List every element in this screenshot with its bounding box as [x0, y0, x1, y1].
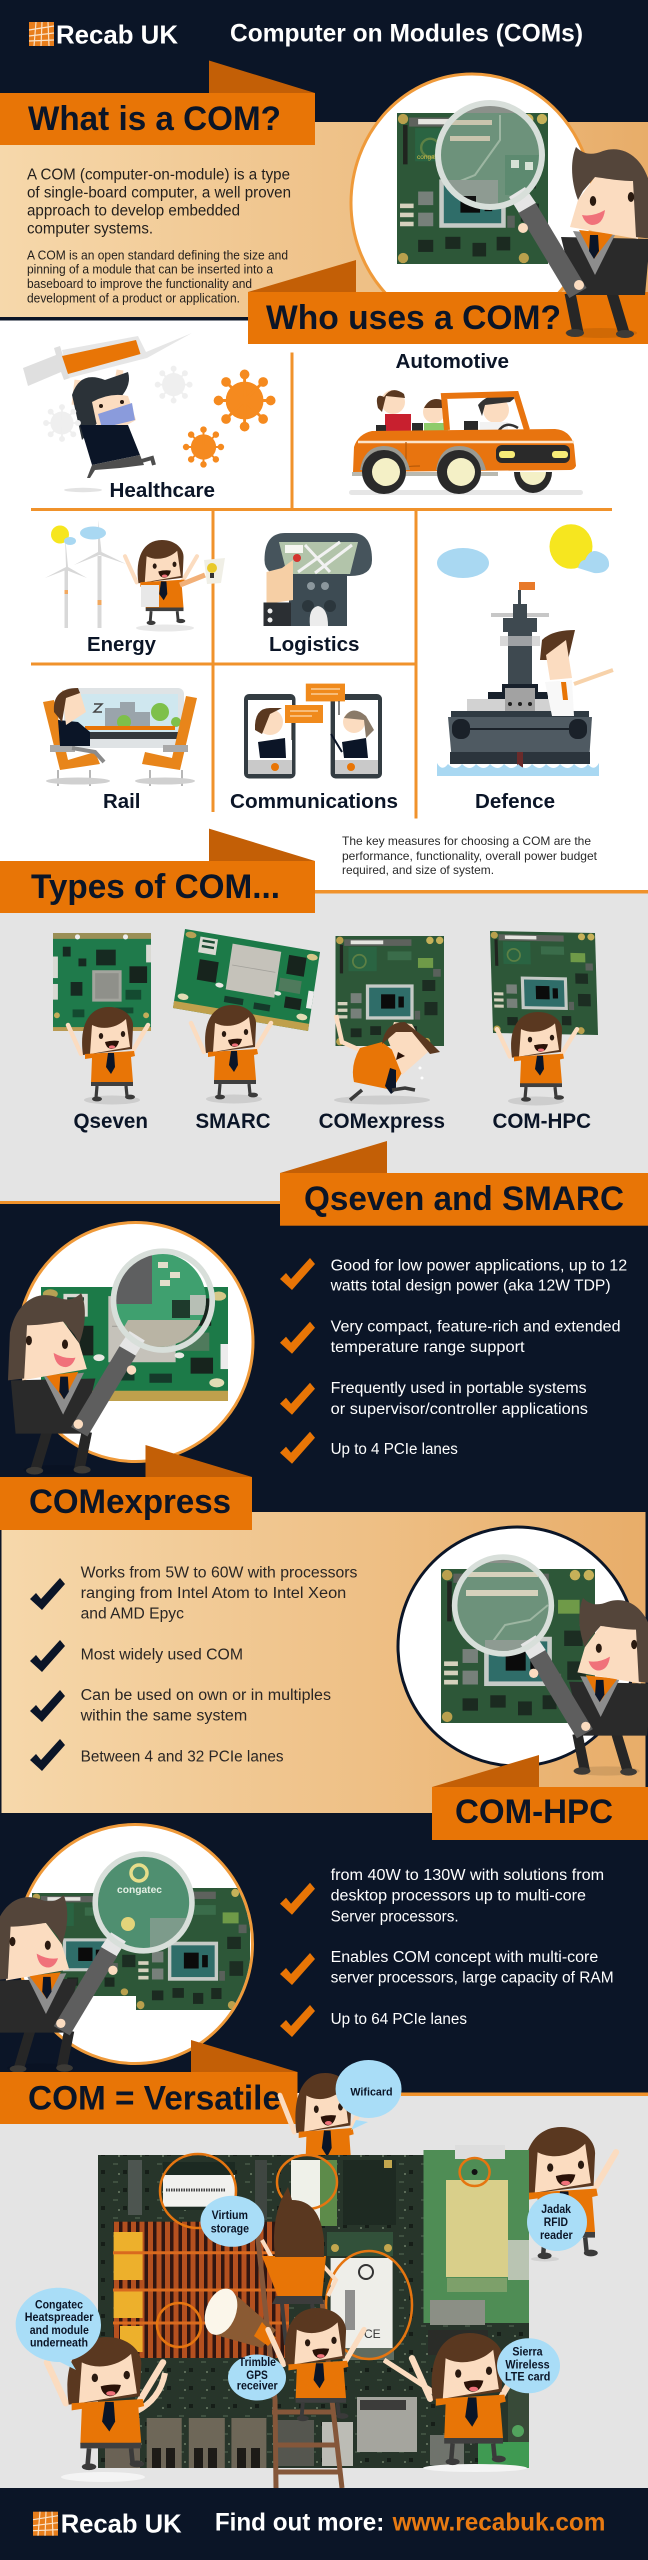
heading: COM = Versatile [0, 2072, 298, 2124]
callout: Virtium storage: Virtium [212, 2210, 248, 2222]
checklist: COM-HPC: Server processors. [331, 1908, 459, 1925]
icon: Recab logo [33, 2512, 58, 2536]
callout: Congatec heatspreader [16, 2288, 101, 2370]
ethernet jacks [105, 2418, 140, 2468]
callout: Jadak RFID reader: Jadak [541, 2204, 572, 2216]
illustration: communications [230, 684, 398, 813]
illustration: automotive [349, 351, 583, 495]
banner fold [209, 60, 315, 93]
checklist: Qseven and SMARC: temperature range support [331, 1339, 525, 1356]
callout: Wificard [336, 2060, 402, 2130]
icon: syringe [23, 333, 192, 386]
call to action: Find out more: [215, 2509, 384, 2537]
hand [264, 560, 293, 626]
text block: definition: A COM (computer-on-module) is a type [27, 166, 290, 183]
sailor [540, 630, 613, 716]
text block: open standard [27, 248, 288, 305]
checklist: COMexpress: within the same system [80, 1708, 247, 1725]
heading: COM-HPC [432, 1787, 648, 1840]
checklist: COMexpress: ranging from Intel Atom to Intel Xeon [81, 1585, 346, 1602]
callout: Virtium storage: storage [211, 2223, 249, 2235]
checklist: COMexpress: Most widely used COM [81, 1646, 243, 1663]
callout: Sierra Wireless LTE card [497, 2338, 560, 2393]
circle with COMexpress board [398, 1527, 636, 1766]
callout: Congatec heatspreader: Congatec [35, 2299, 84, 2311]
panel: types of COM [0, 829, 648, 1204]
magnifier lens [116, 1254, 206, 1347]
label: Communications: Communications [230, 791, 398, 813]
checklist: Qseven and SMARC [280, 1258, 627, 1464]
type: Qseven [53, 933, 151, 1133]
checklist: Qseven and SMARC: Frequently used in portable systems [331, 1380, 587, 1397]
callout: Trimble GPS receiver: Trimble [239, 2357, 276, 2369]
heading: Who uses a COM? [248, 292, 648, 344]
heading: Types of COM... [0, 861, 315, 913]
character: woman on ladder [262, 2187, 336, 2360]
text block: definition [27, 166, 291, 237]
banner fold [146, 1445, 252, 1477]
label: Logistics: Logistics [269, 634, 360, 656]
man with bulb [125, 540, 225, 632]
panel: COMexpress [0, 1445, 648, 1813]
RF card [446, 2180, 508, 2277]
panel: Qseven and SMARC [0, 1141, 648, 1512]
water [437, 763, 599, 776]
label: COM-HPC: COM-HPC [492, 1110, 591, 1133]
character: man with magnifier [8, 1251, 212, 1474]
title: Computer on Modules (COMs) [230, 20, 583, 48]
label: Defence: Defence [475, 791, 555, 813]
lower right parts [428, 2330, 488, 2355]
icon: sun and cloud [51, 526, 106, 545]
character: man with magnifier [438, 103, 648, 338]
label: Qseven: Qseven [74, 1110, 148, 1133]
right phone [331, 694, 382, 778]
woman passenger [377, 390, 411, 434]
type: SMARC [173, 929, 320, 1133]
driver [376, 395, 518, 434]
left phone [244, 694, 296, 778]
character: left man [47, 2337, 165, 2482]
checklist: Qseven and SMARC: Good for low power applications, up to 12 [331, 1258, 627, 1275]
panel: header [0, 0, 648, 122]
heatsink [114, 2222, 289, 2358]
callout: Trimble GPS receiver: GPS [246, 2370, 268, 2382]
callout: Sierra Wireless LTE card: Sierra [512, 2346, 543, 2358]
type: COM-HPC [490, 931, 598, 1133]
illustration: energy [45, 520, 225, 656]
magnifier lens: congatec [117, 1885, 162, 1896]
navigation console [264, 533, 372, 626]
banner fold [191, 2040, 298, 2072]
callout: Jadak RFID reader [527, 2193, 587, 2251]
icon: sun and clouds [437, 524, 609, 578]
callout: Trimble GPS receiver [228, 2354, 286, 2400]
wheels [362, 450, 552, 494]
character: right man [384, 2333, 527, 2472]
icon: wind turbines [45, 520, 126, 628]
checklist: COMexpress: and AMD Epyc [81, 1605, 184, 1622]
circle with COM board: congatec [417, 154, 444, 161]
battleship [448, 582, 592, 772]
LTE card [331, 2258, 393, 2348]
checklist: COM-HPC: server processors, large capacity of RAM [331, 1970, 614, 1987]
brand name: Recab UK [56, 19, 178, 49]
label: Healthcare: Healthcare [110, 480, 215, 502]
checklist: COMexpress [30, 1564, 358, 1771]
checklist: COM-HPC: Enables COM concept with multi-core [331, 1949, 598, 1966]
banner fold [432, 1755, 539, 1787]
text block: key measures: The key measures for choosing a COM are the [342, 834, 591, 848]
character: man with telescope [268, 2308, 364, 2421]
text block: definition: of single-board computer, a well proven [27, 184, 291, 201]
main board photo: CE [364, 2327, 381, 2341]
callout: Jadak RFID reader: reader [540, 2230, 573, 2242]
callout: Sierra Wireless LTE card: Wireless [505, 2359, 550, 2371]
speech bubbles [285, 684, 345, 740]
callout: Congatec heatspreader: underneath [30, 2338, 88, 2350]
brand name: Recab UK [61, 2509, 182, 2539]
illustration: healthcare [23, 333, 275, 502]
panel: footer [0, 2488, 648, 2560]
train window [64, 688, 184, 748]
character: top man [280, 2073, 368, 2191]
character: man with magnifier [455, 1557, 648, 1776]
circle with COM-HPC boards [18, 1824, 252, 2064]
icon: Recab logo [29, 22, 54, 46]
panel: COM = Versatile [0, 2040, 648, 2488]
callout: Jadak RFID reader: RFID [544, 2217, 568, 2229]
checklist: Qseven and SMARC: watts total design power (aka 12W TDP) [330, 1278, 611, 1295]
seats [43, 696, 197, 786]
text block: definition: computer systems. [27, 220, 153, 237]
icon: telescope [199, 2284, 276, 2348]
circle with COM board [351, 74, 593, 332]
illustration: defence [437, 524, 613, 813]
text block: key measures: performance, functionality, overall power budget [342, 849, 598, 863]
label: SMARC: SMARC [196, 1110, 270, 1133]
magnifier lens [458, 1560, 549, 1651]
callout: Congatec heatspreader: Heatspreader [25, 2312, 94, 2324]
USB [277, 2420, 314, 2466]
text block: open standard: pinning of a module that can be inserted into a [27, 263, 273, 277]
text block: key measures: required, and size of system. [342, 863, 494, 877]
heading: COM-HPC: COM-HPC [455, 1793, 613, 1831]
heading: COM = Versatile: COM = Versatile [28, 2079, 281, 2117]
main board photo [98, 2145, 529, 2468]
checklist: COMexpress: Works from 5W to 60W with processors [81, 1564, 358, 1581]
heading: Qseven and SMARC [280, 1173, 648, 1226]
label: Rail: Rail [103, 791, 140, 813]
text block: definition: approach to develop embedded [27, 202, 240, 219]
checklist: COM-HPC: desktop processors up to multi-core [331, 1888, 586, 1905]
checklist: Qseven and SMARC: Very compact, feature-rich and extended [331, 1319, 621, 1336]
sleeping man [54, 688, 104, 762]
icon: viruses [44, 366, 275, 467]
callout: Congatec heatspreader: and module [30, 2325, 89, 2337]
SSD [163, 2162, 235, 2210]
illustration: logistics [264, 533, 372, 656]
text block: open standard: A COM is an open standard defining the size and [27, 248, 288, 262]
magnifier lens [98, 1856, 190, 1948]
checklist: COMexpress: Can be used on own or in multiples [81, 1687, 331, 1704]
callout: Wificard: Wificard [350, 2087, 393, 2099]
checklist: Qseven and SMARC: Up to 4 PCIe lanes [331, 1441, 458, 1458]
circle with SMARC board [18, 1222, 253, 1462]
panel: COM-HPC [0, 1755, 648, 2093]
label: Energy: Energy [87, 634, 157, 656]
heading: What is a COM?: What is a COM? [28, 100, 281, 138]
heading: Who uses a COM?: Who uses a COM? [266, 299, 561, 337]
text block: key measures [342, 834, 598, 877]
label: COMexpress: COMexpress [319, 1110, 445, 1133]
checklist: COMexpress: Between 4 and 32 PCIe lanes [81, 1749, 284, 1766]
checklist: COM-HPC [280, 1867, 614, 2037]
callout: Trimble GPS receiver: receiver [237, 2380, 278, 2392]
label: Automotive: Automotive [396, 351, 509, 373]
heading: What is a COM? [0, 93, 315, 145]
panel: what is a COM [0, 60, 648, 344]
checklist: COM-HPC: from 40W to 130W with solutions from [331, 1867, 604, 1884]
magnifier lens [441, 106, 539, 204]
ladder [257, 2230, 342, 2488]
heading: COMexpress [0, 1477, 252, 1530]
wifi card [291, 2160, 337, 2223]
heading: Qseven and SMARC: Qseven and SMARC [304, 1180, 624, 1218]
callout: Sierra Wireless LTE card: LTE card [505, 2372, 550, 2384]
callout: Virtium storage [200, 2196, 264, 2247]
illustration: rail [43, 688, 197, 813]
banner fold [280, 1141, 387, 1173]
checklist: COM-HPC: Up to 64 PCIe lanes [331, 2011, 467, 2028]
heading: COMexpress: COMexpress [29, 1483, 231, 1521]
text block: open standard: baseboard to improve the functionality and [27, 277, 252, 291]
character: RFID man [504, 2127, 616, 2262]
car body [352, 394, 576, 476]
checklist: Qseven and SMARC: or supervisor/controller applications [331, 1401, 588, 1418]
child passenger [423, 399, 448, 435]
panel: industries grid [23, 333, 613, 818]
memory slots [128, 2160, 142, 2215]
website: www.recabuk.com [392, 2509, 605, 2537]
mini card slot [327, 2232, 393, 2256]
SD slot [357, 2397, 417, 2452]
type: COMexpress [319, 936, 445, 1133]
character: man with magnifier [0, 1854, 192, 2073]
text block: open standard: development of a product or application. [27, 291, 240, 305]
heading: Types of COM...: Types of COM... [31, 868, 280, 906]
banner fold [209, 829, 315, 861]
highlight rings [157, 2154, 490, 2359]
banner fold [248, 260, 356, 292]
